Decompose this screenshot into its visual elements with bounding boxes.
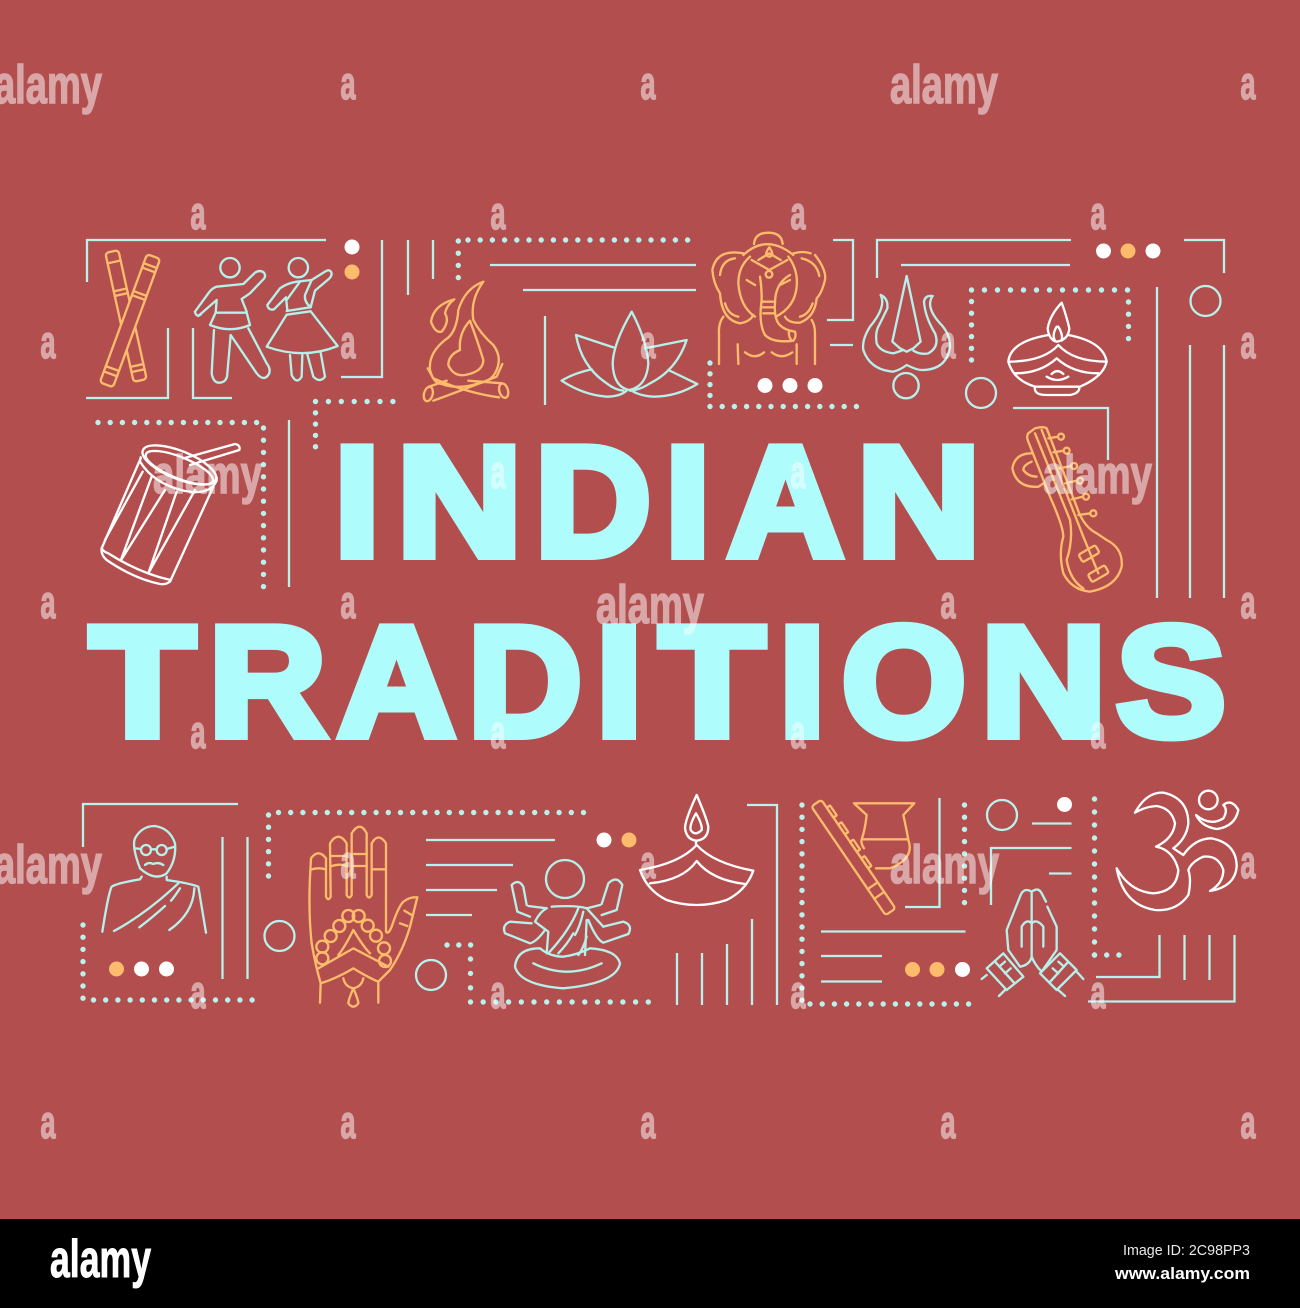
watermarks: a: [1240, 576, 1256, 628]
footer bar: [0, 1219, 1300, 1308]
circle ornaments: [264, 286, 1220, 990]
watermarks: a: [790, 446, 806, 498]
title: D: [468, 594, 582, 770]
watermarks: a: [940, 316, 956, 368]
watermarks: a: [1240, 1096, 1256, 1148]
icon: bonfire: [422, 282, 510, 402]
title: O: [842, 594, 966, 770]
icon: dandiya sticks: [100, 250, 160, 387]
watermarks: a: [490, 446, 506, 498]
watermarks: a: [640, 836, 656, 888]
watermarks: a: [1090, 706, 1106, 758]
icon: henna hand: [309, 827, 417, 1007]
footer bar: Image ID: 2C98PP3: [1123, 1242, 1250, 1259]
watermarks: a: [1240, 836, 1256, 888]
watermarks: a: [1090, 966, 1106, 1018]
watermarks: a: [940, 1096, 956, 1148]
icon: dholak drum: [102, 437, 240, 584]
watermarks: a: [940, 576, 956, 628]
icon: namaste hands: [982, 890, 1083, 996]
title: A: [728, 414, 843, 590]
watermarks: a: [340, 836, 356, 888]
watermarks: a: [190, 966, 206, 1018]
watermarks: a: [790, 187, 806, 239]
icon: om symbol: [1117, 791, 1238, 910]
title: N: [981, 594, 1107, 770]
icon: ganesha: [712, 233, 825, 364]
watermarks: alamy: [1043, 445, 1152, 505]
title: N: [397, 414, 522, 590]
watermarks: a: [340, 576, 356, 628]
title: D: [535, 414, 651, 590]
watermarks: alamy: [890, 55, 998, 115]
title: I: [779, 594, 825, 770]
title: S: [1116, 594, 1226, 770]
watermarks: a: [1240, 57, 1256, 109]
title: T: [90, 594, 195, 770]
title: N: [857, 414, 980, 590]
title: T: [660, 594, 765, 770]
watermarks: a: [190, 706, 206, 758]
watermarks: a: [1090, 187, 1106, 239]
watermarks: a: [790, 706, 806, 758]
watermarks: a: [340, 57, 356, 109]
dot clusters: [109, 240, 1160, 977]
watermarks: a: [190, 187, 206, 239]
footer bar: www.alamy.com: [1114, 1264, 1250, 1283]
icon: diya lamp: [640, 795, 753, 905]
watermarks: a: [490, 706, 506, 758]
title: R: [209, 594, 326, 770]
title: I: [665, 414, 710, 590]
icon: oil lamp: [1008, 303, 1107, 395]
watermarks: a: [490, 187, 506, 239]
icon: trident: [863, 276, 950, 398]
watermarks: alamy: [890, 835, 999, 895]
title: I: [334, 414, 380, 590]
icon: veena: [1012, 427, 1122, 592]
watermarks: a: [640, 57, 656, 109]
watermarks: a: [1240, 316, 1256, 368]
watermarks: a: [640, 1096, 656, 1148]
watermarks: a: [40, 576, 56, 628]
watermarks: a: [40, 316, 56, 368]
watermarks: a: [40, 1096, 56, 1148]
title: I: [596, 594, 642, 770]
title: A: [338, 594, 455, 770]
icon: gandhi portrait: [102, 826, 206, 933]
icon: meditating goddess: [504, 860, 630, 988]
watermarks: alamy: [596, 575, 704, 635]
icon: dancing couple: [195, 258, 338, 383]
watermarks: a: [790, 966, 806, 1018]
watermarks: a: [340, 316, 356, 368]
watermarks: a: [640, 316, 656, 368]
icon: lotus: [562, 312, 697, 397]
watermarks: a: [340, 1096, 356, 1148]
watermarks: alamy: [153, 445, 262, 505]
footer bar: alamy: [50, 1230, 151, 1289]
title: [90, 414, 1226, 770]
icon: flute and pot: [811, 797, 914, 915]
watermarks: a: [490, 966, 506, 1018]
